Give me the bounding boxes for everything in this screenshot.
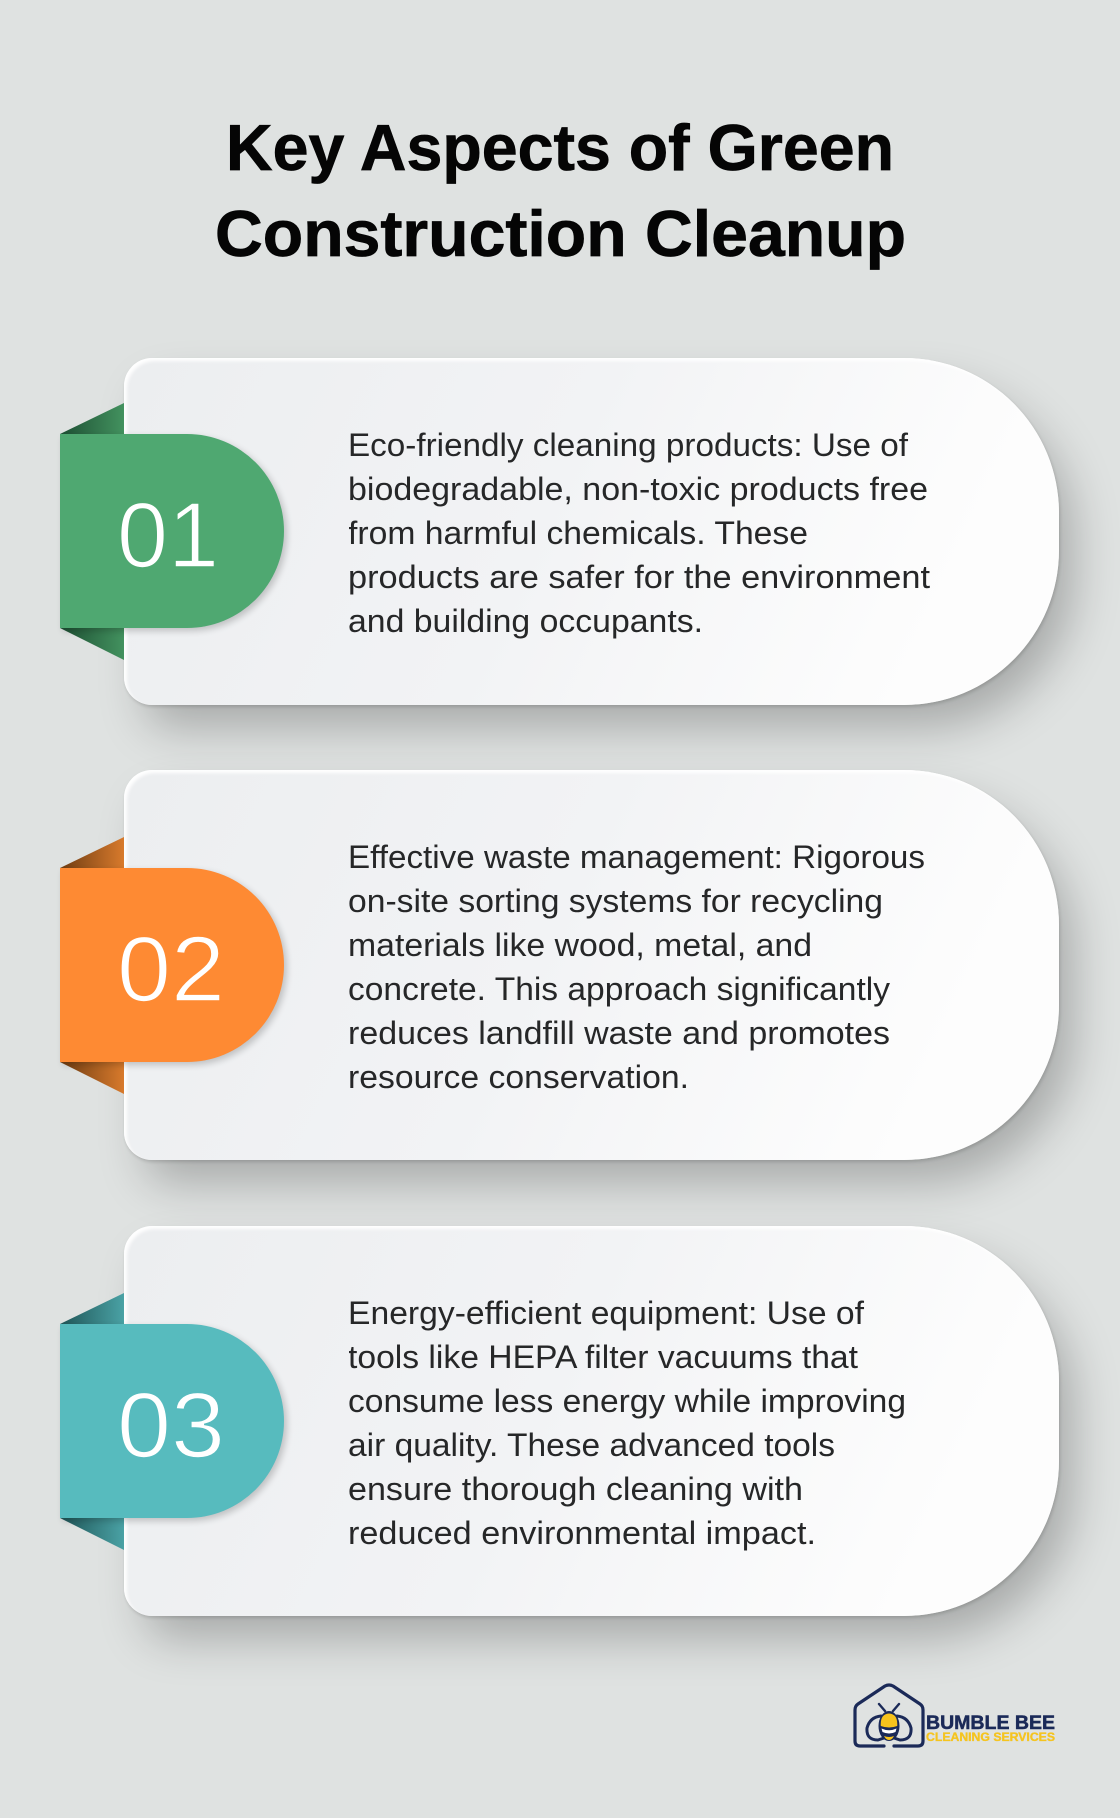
ribbon folds: teal [60,1293,124,1550]
text: step 2 description: on-site sorting systems for recycling [349,883,883,919]
text: step 3 description: consume less energy while improving [349,1383,906,1419]
text: step 2 description: concrete. This approach significantly [349,971,890,1007]
logo: Bumble Bee Cleaning Services [853,1683,1055,1748]
card background [124,358,1059,705]
panel: step 2 effective waste management [60,770,1096,1205]
text: step 1 description: Eco-friendly cleaning products: Use of [349,427,908,463]
text: step 3 description: Energy-efficient equipment: Use of [349,1295,864,1331]
logo text: tagline: CLEANING SERVICES [926,1732,1055,1744]
text: step 1 description [349,427,930,639]
panel: step 1 eco-friendly cleaning products [60,358,1096,750]
ribbon folds: green [60,403,124,660]
panel: step 3 energy-efficient equipment [60,1226,1096,1661]
text: step 2 description: Effective waste management: Rigorous [349,839,925,875]
text: step 1 description: products are safer for the environment [349,559,930,595]
text: step 2 description: reduces landfill waste and promotes [349,1015,890,1051]
text: step 3 description [349,1295,906,1551]
number tab: 02 [60,868,284,1062]
number: 03: 03 [117,1373,225,1477]
text: step 3 description: air quality. These advanced tools [349,1427,835,1463]
number: 02: 02 [117,917,225,1021]
ribbon folds: orange [60,837,124,1094]
text: step 3 description: reduced environmental impact. [349,1515,816,1551]
number: 01: 01 [117,483,219,587]
text: step 1 description: from harmful chemicals. These [349,515,808,551]
title: Key Aspects of Green [226,111,894,184]
card background [124,1226,1059,1616]
number tab: 03 [60,1324,284,1518]
number tab: 01 [60,434,284,628]
logo text: brand name: BUMBLE BEE [926,1713,1055,1734]
text: step 3 description: ensure thorough cleaning with [349,1471,803,1507]
icon: house outline with bee [855,1685,923,1746]
text: step 2 description: materials like wood, metal, and [349,927,812,963]
text: step 3 description: tools like HEPA filter vacuums that [349,1339,858,1375]
card background [124,770,1059,1160]
text: step 1 description: and building occupants. [349,603,703,639]
text: step 1 description: biodegradable, non-toxic products free [349,471,928,507]
text: step 2 description: resource conservation. [349,1059,689,1095]
title: Construction Cleanup [215,197,906,270]
text: step 2 description [349,839,925,1095]
title [215,111,906,270]
